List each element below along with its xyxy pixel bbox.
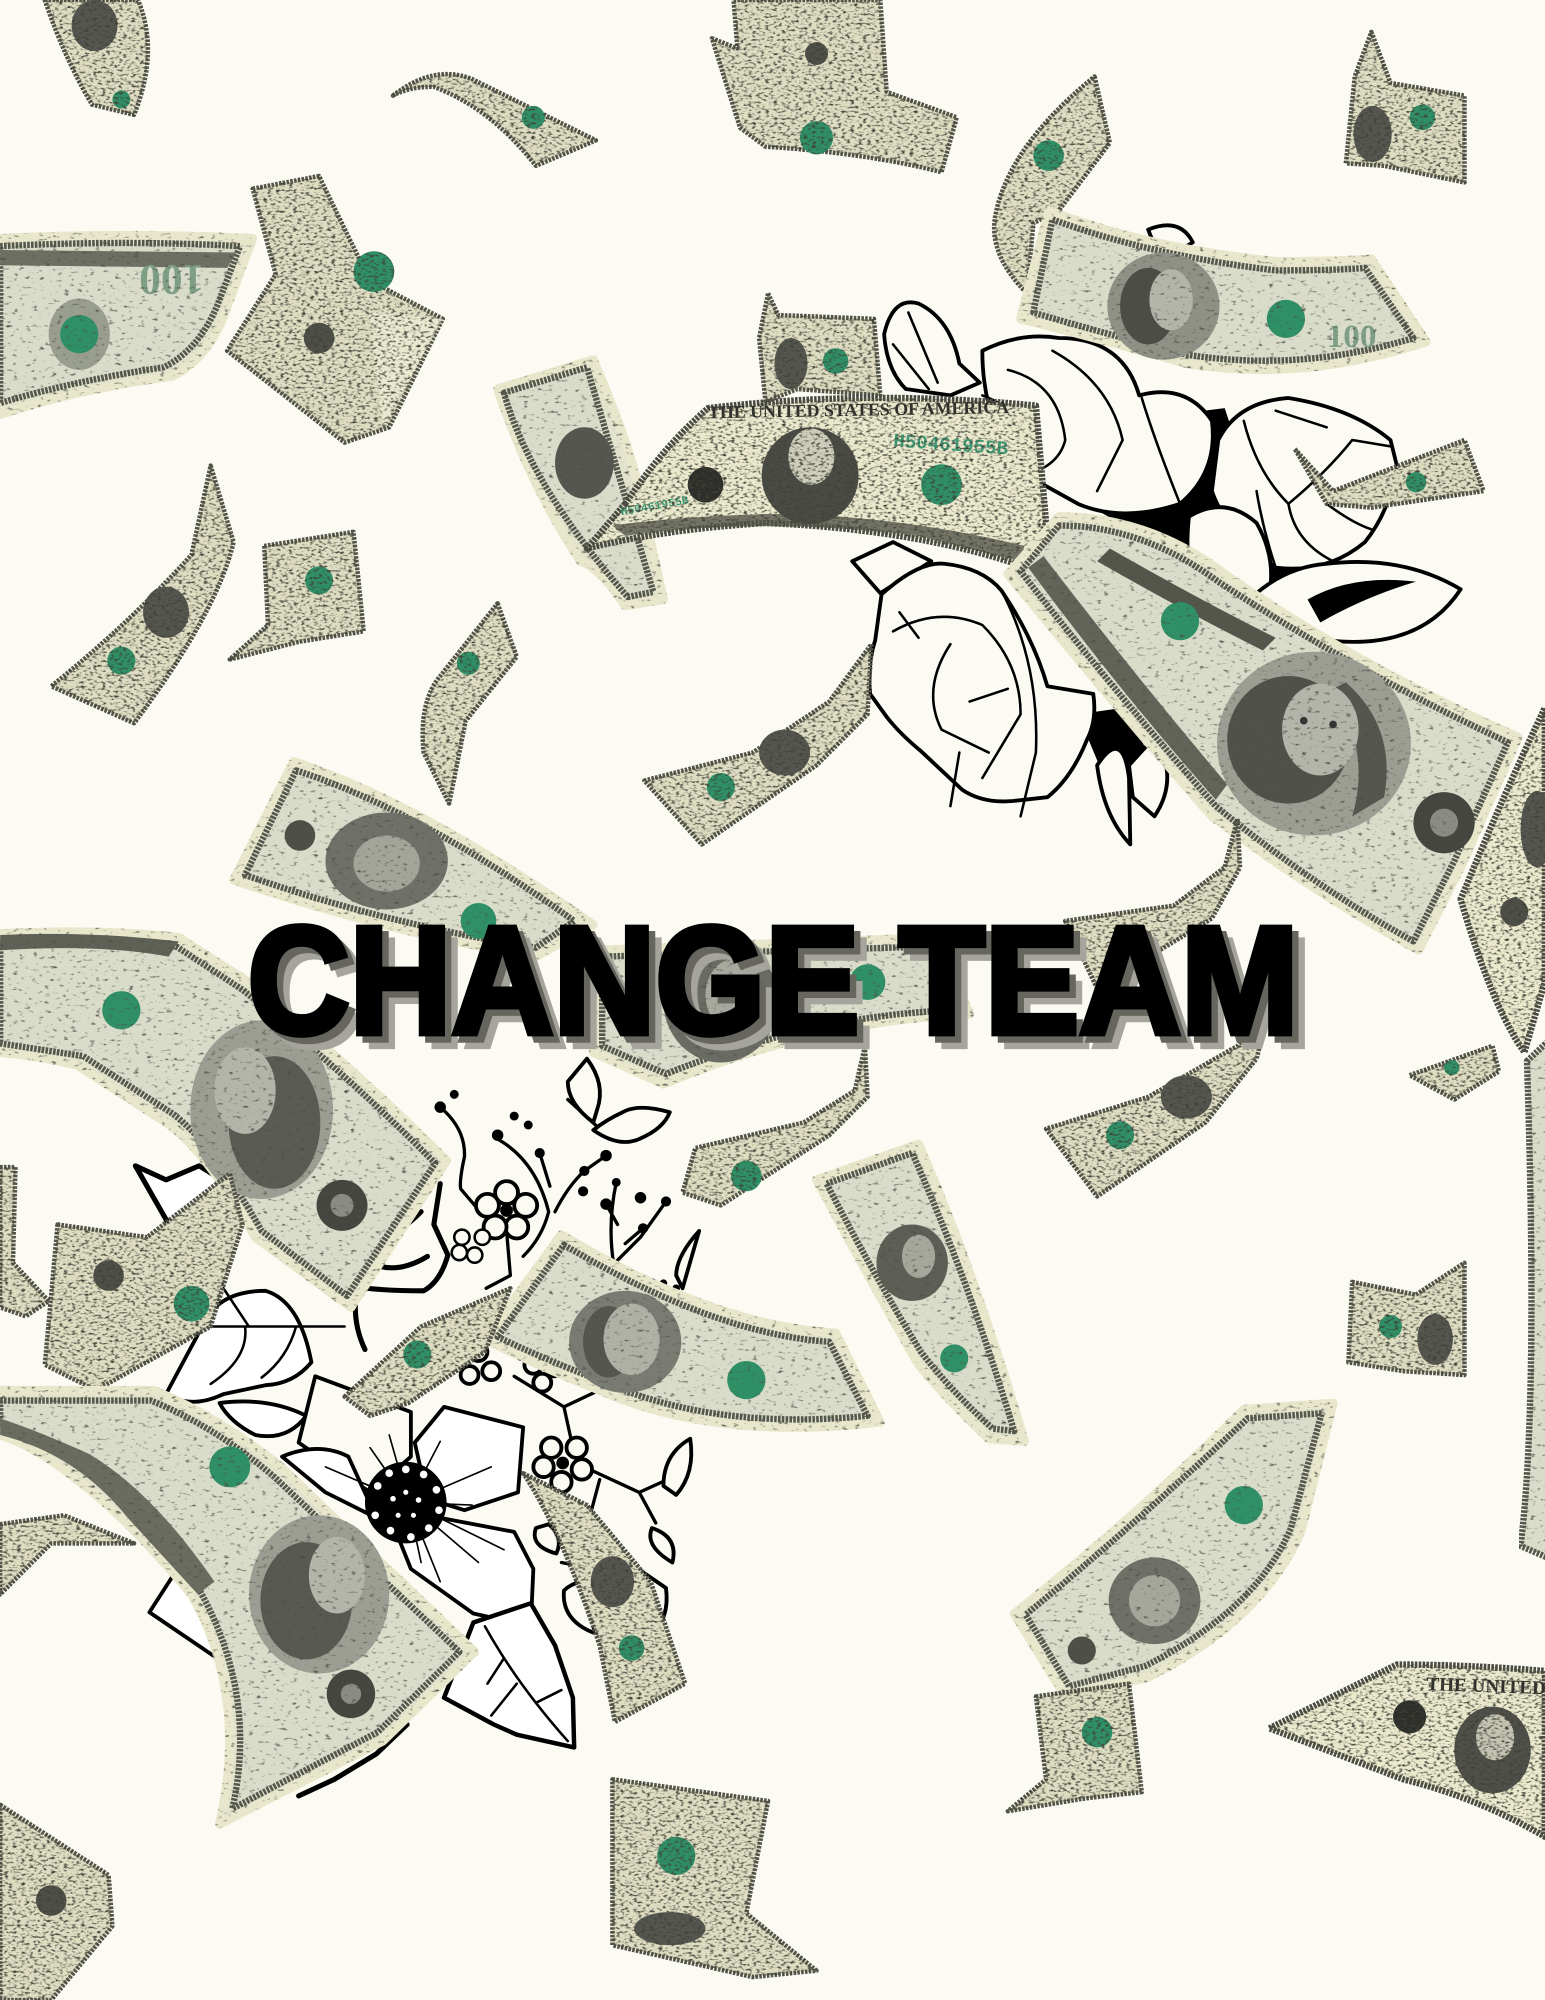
bill: top left corner one: [45, 0, 148, 115]
bill: right of title: [1065, 819, 1240, 989]
bill: right edge strip: [1521, 1040, 1545, 1559]
bill: left edge small curl: [0, 1515, 134, 1594]
bill: lower right one: [1269, 1665, 1545, 1837]
bill: centre hundred: [485, 1235, 880, 1427]
bill: bottom centre: [612, 1779, 817, 1977]
bill: small left: [51, 466, 234, 723]
bill: centre one dollar: THE UNITED STATES OF AMERICA: [708, 397, 1009, 422]
floral illustration: top right peonies: [852, 225, 1461, 844]
bill: right small flat: [1348, 1263, 1464, 1375]
bill: centre hundred behind title: [593, 938, 970, 1084]
bill: small below right hundred: [1008, 1684, 1142, 1811]
floral illustration: bottom left blossom and sprigs: [135, 1059, 699, 1796]
bill: strip on blossom right: [523, 1473, 685, 1722]
bill: centre curl on blossom: [345, 1288, 510, 1416]
bill: left one folded: [45, 1173, 243, 1390]
bill: big hundred top right: 100: [1327, 318, 1376, 355]
bill: hundred left top: 100: [139, 255, 204, 303]
bill: centre one dollar: [587, 397, 1046, 568]
bill: curl centre left: [423, 603, 517, 804]
bill: big hundred top right: [1021, 210, 1426, 370]
bill: top centre: [712, 0, 957, 172]
bill: bottom left corner: [0, 1805, 112, 2000]
bill: far right one: [1461, 708, 1545, 1052]
bill: above blossom right: [683, 1046, 868, 1205]
bill: top curl: [393, 74, 596, 166]
title: CHANGE TEAM with layered shadow: CHANGE TEAM: [254, 902, 1305, 1073]
bill: hundred upright centre: [817, 1144, 1024, 1441]
bill: left edge: [0, 1167, 49, 1316]
bill: centre one dollar: H50461955B: [620, 494, 690, 519]
bill: folded one upper left: [227, 176, 443, 443]
bill: below peony: [644, 644, 871, 844]
bill: right below title: [1046, 1008, 1269, 1196]
bill: hundred left of title: [234, 761, 593, 957]
bill: right small curl: [1295, 440, 1484, 508]
bill: small square: [230, 532, 364, 659]
bill: long strip behind the one: [498, 360, 663, 606]
bill: hundred lower right: [1014, 1403, 1333, 1696]
bill: centre one dollar: H50461955B: [893, 430, 1009, 460]
bill: top right: [1346, 32, 1464, 182]
bill: hundred left top: [0, 235, 253, 415]
bill: large hundred right: [1008, 517, 1518, 950]
title: CHANGE TEAM with layered shadow: CHANGE TEAM: [248, 895, 1299, 1066]
bill: small one near peonies: [759, 293, 880, 402]
bill: large hundred lower left: [0, 1390, 475, 1824]
flower heads on sprigs: [452, 1181, 592, 1492]
bill: upright curl top: [994, 77, 1110, 293]
bill: large hundred left: [0, 932, 447, 1307]
title: CHANGE TEAM with layered shadow: CHANGE TEAM: [260, 908, 1311, 1079]
bill: tiny right: [1410, 1046, 1499, 1099]
